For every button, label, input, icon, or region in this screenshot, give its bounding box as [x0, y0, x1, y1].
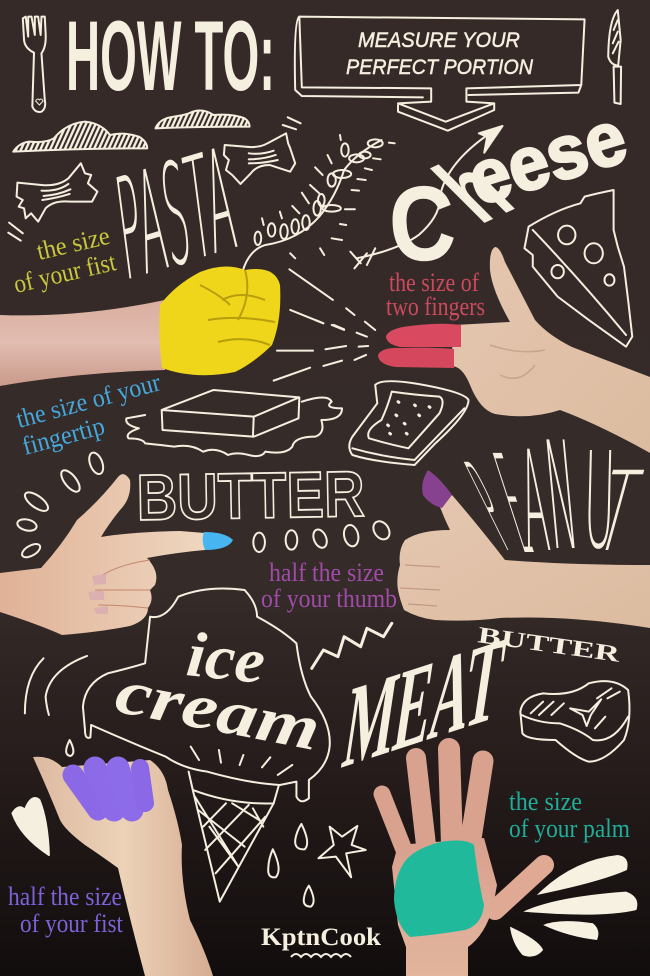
label: size of two fingers: the size of: [389, 268, 479, 297]
text: ice cream: cream: [110, 655, 326, 764]
illustration: butter block: [126, 390, 342, 456]
banner: measure your perfect portion: MEASURE YOUR: [358, 29, 520, 52]
label: size of your fingertip: [13, 367, 164, 461]
hand: open palm with teal: [382, 749, 544, 976]
heading: peanut: E: [482, 427, 547, 585]
text: ice cream: [110, 618, 326, 764]
clouds: [13, 111, 250, 152]
hand: thumb up, purple tip: [397, 470, 650, 628]
heading: cheese with arrow: eese: [458, 94, 636, 222]
label: size of your fingertip: fingertip: [19, 411, 108, 461]
icon: pasta bows: [8, 117, 301, 241]
heading: butter: BUTTER: [136, 457, 365, 534]
label: half the size of your thumb: of your thumb: [261, 584, 397, 613]
heading: peanut: N: [539, 410, 584, 583]
heading: meat: MEAT: [336, 612, 512, 795]
heading: peanut: A: [513, 422, 555, 584]
label: size of two fingers: two fingers: [386, 292, 485, 321]
zigzag: [312, 623, 392, 668]
label: size of your fingertip: the size of your: [13, 367, 164, 434]
illustration: steak: [520, 681, 630, 762]
label: half the size of your thumb: half the size: [269, 558, 384, 587]
icon: left curves: [25, 656, 87, 715]
icon: drops and star: [66, 740, 366, 907]
icon: knife: [608, 10, 621, 104]
hand: holding purple fist: [33, 757, 213, 976]
drip marks around the thumb and below butter: [15, 451, 392, 560]
heading: cheese with arrow: C: [385, 162, 459, 284]
label: size of your palm: the size: [509, 787, 582, 816]
label: size of your fist: [11, 221, 119, 299]
hand: two red fingers: [378, 247, 650, 453]
label: half the size of your thumb: [261, 558, 397, 613]
icon: fork: [23, 17, 46, 112]
heading: peanut: T: [583, 449, 650, 577]
illustration: toast: [349, 381, 468, 465]
banner: measure your perfect portion: [295, 17, 585, 131]
label: size of your palm: of your palm: [509, 814, 630, 843]
label: size of your fist: of your fist: [11, 247, 119, 299]
splash: [510, 855, 637, 957]
illustration: cheese wedge: [524, 190, 632, 347]
text: ice cream: ice: [184, 618, 269, 697]
illustration: ice cream cone: [83, 589, 330, 902]
label: size of your fist: the size: [34, 221, 112, 266]
label: half the size of your fist: of your fist: [20, 909, 124, 938]
heading: cheese with arrow: h: [412, 139, 535, 242]
small heading: butter: BUTTER: [476, 622, 622, 667]
icon: heart: [12, 798, 49, 855]
banner: measure your perfect portion: PERFECT PORTION: [346, 56, 534, 79]
hand: yellow fist: [0, 266, 280, 386]
hand: pointing, blue fingertip: [0, 474, 233, 635]
logo: kptncook: KptnCook: [261, 924, 381, 951]
label: half the size of your fist: [8, 882, 124, 938]
text: HOW TO:: [66, 0, 275, 111]
heading: peanut: [449, 410, 650, 585]
label: size of two fingers: [386, 268, 485, 321]
label: size of your palm: [509, 787, 630, 843]
heading: peanut: U: [582, 424, 617, 579]
spray lines from fist: [274, 269, 375, 381]
heading: cheese with arrow: [350, 94, 636, 284]
heading: peanut: P: [449, 437, 531, 579]
illustration: herb branch: [243, 135, 395, 272]
label: half the size of your fist: half the size: [8, 882, 122, 911]
heading: pasta: PASTA: [109, 119, 243, 314]
